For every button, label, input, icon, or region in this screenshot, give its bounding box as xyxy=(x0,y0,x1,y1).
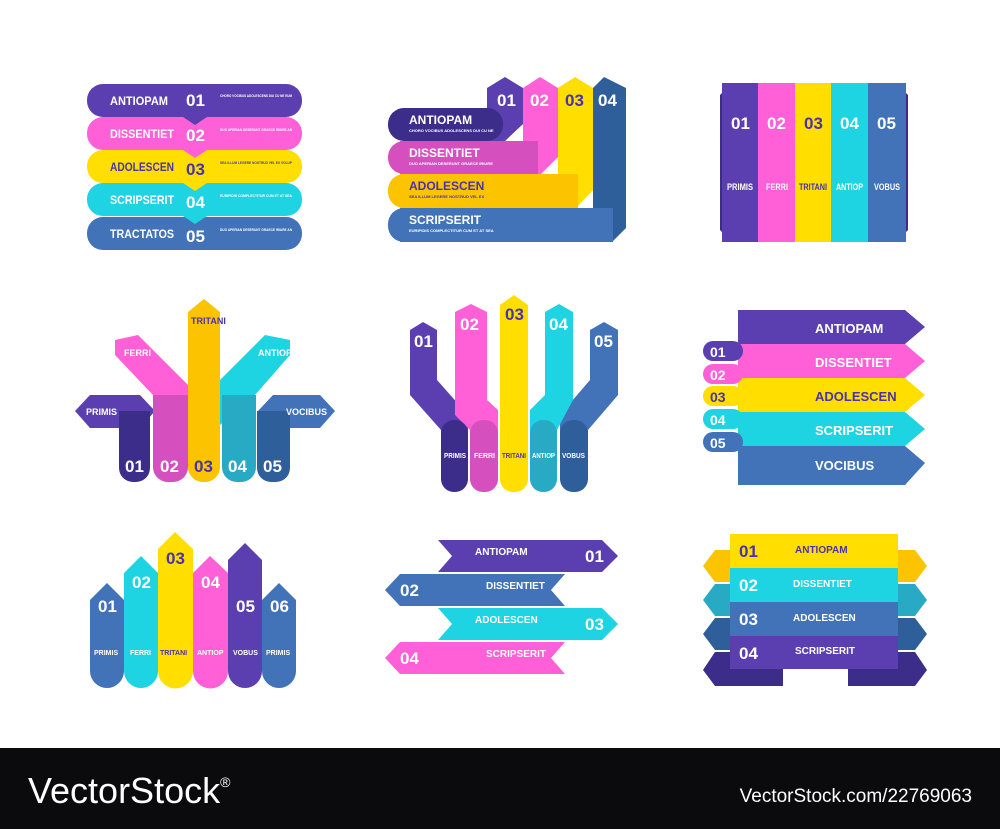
panel: fan of five columns: TRITANI xyxy=(502,453,526,460)
panel: stacked pills: 01 xyxy=(186,91,205,110)
panel: fan with side arrows: 03 xyxy=(194,457,213,476)
panel: stacked box with side hexes: 02 xyxy=(739,576,758,595)
panel: six arrow columns: 05 xyxy=(236,597,255,616)
panel: six arrow columns: FERRI xyxy=(130,650,151,657)
panel: stacked pills: ANTIOPAM xyxy=(110,94,168,108)
panel: fan with side arrows: TRITANI xyxy=(191,316,226,326)
panel: fan with side arrows: 02 xyxy=(160,457,179,476)
panel: stacked pills: 05 xyxy=(186,227,205,246)
panel: six arrow columns: 03 xyxy=(166,549,185,568)
panel: right arrows with tabs: ANTIOPAM xyxy=(815,321,883,336)
panel: fan of five columns: VOBUS xyxy=(562,453,585,460)
panel: five columns box: 02 xyxy=(767,114,786,133)
panel: stacked pills: 02 xyxy=(186,126,205,145)
panel: fan of five columns: 01 xyxy=(414,332,433,351)
panel: zigzag ribbons: 03 xyxy=(585,615,604,634)
panel: stacked box with side hexes: DISSENTIET xyxy=(793,579,852,590)
panel: five columns box: PRIMIS xyxy=(727,182,753,192)
panel: six arrow columns: 04 xyxy=(201,573,220,592)
panel: fan of five columns: 04 xyxy=(549,315,568,334)
panel: stacked pills: CHORO VOCIBUS ADOLESCENS DUI CU NE EUM xyxy=(220,93,293,98)
footer bar xyxy=(0,748,1000,829)
panel: stacked pills: TRACTATOS xyxy=(110,227,174,241)
panel: fan with side arrows: 04 xyxy=(228,457,247,476)
panel: six arrow columns: 02 xyxy=(132,573,151,592)
panel: right arrows with tabs: 02 xyxy=(710,367,726,383)
panel: fan with side arrows: PRIMIS xyxy=(86,407,117,417)
panel: stacked pills: ADOLESCEN xyxy=(110,160,174,174)
panel: right arrows with tabs: 01 xyxy=(710,344,726,360)
panel: L-shaped bars: CHORO VOCIBUS ADOLESCENS DUI CU NE xyxy=(409,128,494,133)
panel: zigzag ribbons: 01 xyxy=(585,547,604,566)
panel: right arrows with tabs: VOCIBUS xyxy=(815,458,875,473)
panel: six arrow columns: ANTIOP xyxy=(197,650,224,657)
panel: right arrows with tabs: SCRIPSERIT xyxy=(815,423,893,438)
panel: five columns box: TRITANI xyxy=(799,182,827,192)
panel: fan of five columns: 02 xyxy=(460,315,479,334)
panel: six arrow columns: PRIMIS xyxy=(94,650,118,657)
panel: zigzag ribbons: 04 xyxy=(400,649,419,668)
panel: six arrow columns: 06 xyxy=(270,597,289,616)
panel: six arrow columns xyxy=(90,532,296,688)
panel: L-shaped bars: EURIPIDIS COMPLECTITUR CUM ET AT SEA xyxy=(409,228,494,233)
panel: right arrows with tabs: DISSENTIET xyxy=(815,355,892,370)
panel: L-shaped bars: ANTIOPAM xyxy=(409,113,472,127)
footer bar: ® xyxy=(220,774,231,790)
panel: stacked box with side hexes: 04 xyxy=(739,644,758,663)
panel: stacked box with side hexes: 03 xyxy=(739,610,758,629)
panel: zigzag ribbons: ANTIOPAM xyxy=(475,547,528,558)
panel: L-shaped bars: ADOLESCEN xyxy=(409,179,484,193)
panel: L-shaped bars: SEA ILLUM LEGERE NOSTRUD VEL EX xyxy=(409,194,484,199)
panel: zigzag ribbons: DISSENTIET xyxy=(486,581,545,592)
panel: zigzag ribbons xyxy=(385,540,618,674)
panel: stacked box with side hexes: ADOLESCEN xyxy=(793,613,856,624)
panel: fan with side arrows: ANTIOP xyxy=(258,348,292,358)
panel: stacked box with side hexes: ANTIOPAM xyxy=(795,545,848,556)
panel: L-shaped bars: SCRIPSERIT xyxy=(409,213,482,227)
panel: right arrows with tabs: ADOLESCEN xyxy=(815,389,897,404)
panel: L-shaped bars: DUO APERIAN DESERUNT GRAECE IRIURE xyxy=(409,161,493,166)
panel: zigzag ribbons: SCRIPSERIT xyxy=(486,649,546,660)
panel: stacked pills: 03 xyxy=(186,160,205,179)
panel: stacked box with side hexes: 01 xyxy=(739,542,758,561)
panel: fan of five columns: ANTIOP xyxy=(532,453,555,460)
panel: fan of five columns: FERRI xyxy=(474,453,495,460)
footer bar: VectorStock.com/22769063 xyxy=(740,786,972,807)
panel: L-shaped bars: 03 xyxy=(565,91,584,110)
panel: L-shaped bars: 04 xyxy=(598,91,617,110)
footer bar: VectorStock xyxy=(28,770,220,811)
panel: six arrow columns: PRIMIS xyxy=(266,650,290,657)
panel: stacked pills: EURIPIDIS COMPLECTITUR CUM ET AT SEA xyxy=(220,193,292,198)
panel: L-shaped bars xyxy=(388,77,626,242)
panel: six arrow columns: VOBUS xyxy=(233,650,258,657)
panel: stacked pills: 04 xyxy=(186,193,205,212)
panel: five columns box: FERRI xyxy=(766,182,788,192)
panel: stacked box with side hexes: SCRIPSERIT xyxy=(795,646,855,657)
panel: six arrow columns: TRITANI xyxy=(160,650,187,657)
panel: fan of five columns: 03 xyxy=(505,305,524,324)
panel: stacked pills: SCRIPSERIT xyxy=(110,193,175,207)
panel: fan with side arrows: FERRI xyxy=(124,348,151,358)
panel: right arrows with tabs: 03 xyxy=(710,389,726,405)
panel: zigzag ribbons: ADOLESCEN xyxy=(475,615,538,626)
panel: fan of five columns: PRIMIS xyxy=(444,453,466,460)
panel: five columns box: 05 xyxy=(877,114,896,133)
panel: zigzag ribbons: 02 xyxy=(400,581,419,600)
panel: stacked box with side hexes xyxy=(703,534,927,686)
panel: right arrows with tabs: 04 xyxy=(710,412,726,428)
panel: L-shaped bars: 02 xyxy=(530,91,549,110)
panel: five columns box: 04 xyxy=(840,114,859,133)
panel: stacked pills: DISSENTIET xyxy=(110,127,175,141)
panel: five columns box: VOBUS xyxy=(874,182,900,192)
panel: stacked pills: DUO APERIAN DESERUNT GRAECE IRIURE AN xyxy=(220,127,292,132)
panel: six arrow columns: 01 xyxy=(98,597,117,616)
panel: stacked pills: DUO APERIAN DESERUNT GRAECE IRIURE AN xyxy=(220,227,292,232)
panel: five columns box xyxy=(720,83,908,242)
panel: five columns box: 01 xyxy=(731,114,750,133)
panel: five columns box: 03 xyxy=(804,114,823,133)
panel: right arrows with tabs xyxy=(703,310,925,485)
panel: stacked pills: SEA ILLUM LEGERE NOSTRUD VEL EX VOLUP xyxy=(220,160,292,165)
panel: right arrows with tabs: 05 xyxy=(710,435,726,451)
panel: L-shaped bars: DISSENTIET xyxy=(409,146,480,160)
panel: fan of five columns: 05 xyxy=(594,332,613,351)
panel: L-shaped bars: 01 xyxy=(497,91,516,110)
panel: fan with side arrows xyxy=(75,299,335,482)
panel: fan of five columns xyxy=(410,295,618,492)
panel: five columns box: ANTIOP xyxy=(836,182,863,192)
panel: fan with side arrows: 05 xyxy=(263,457,282,476)
panel: fan with side arrows: 01 xyxy=(125,457,144,476)
panel: stacked pills xyxy=(87,84,302,250)
panel: fan with side arrows: VOCIBUS xyxy=(286,407,327,417)
